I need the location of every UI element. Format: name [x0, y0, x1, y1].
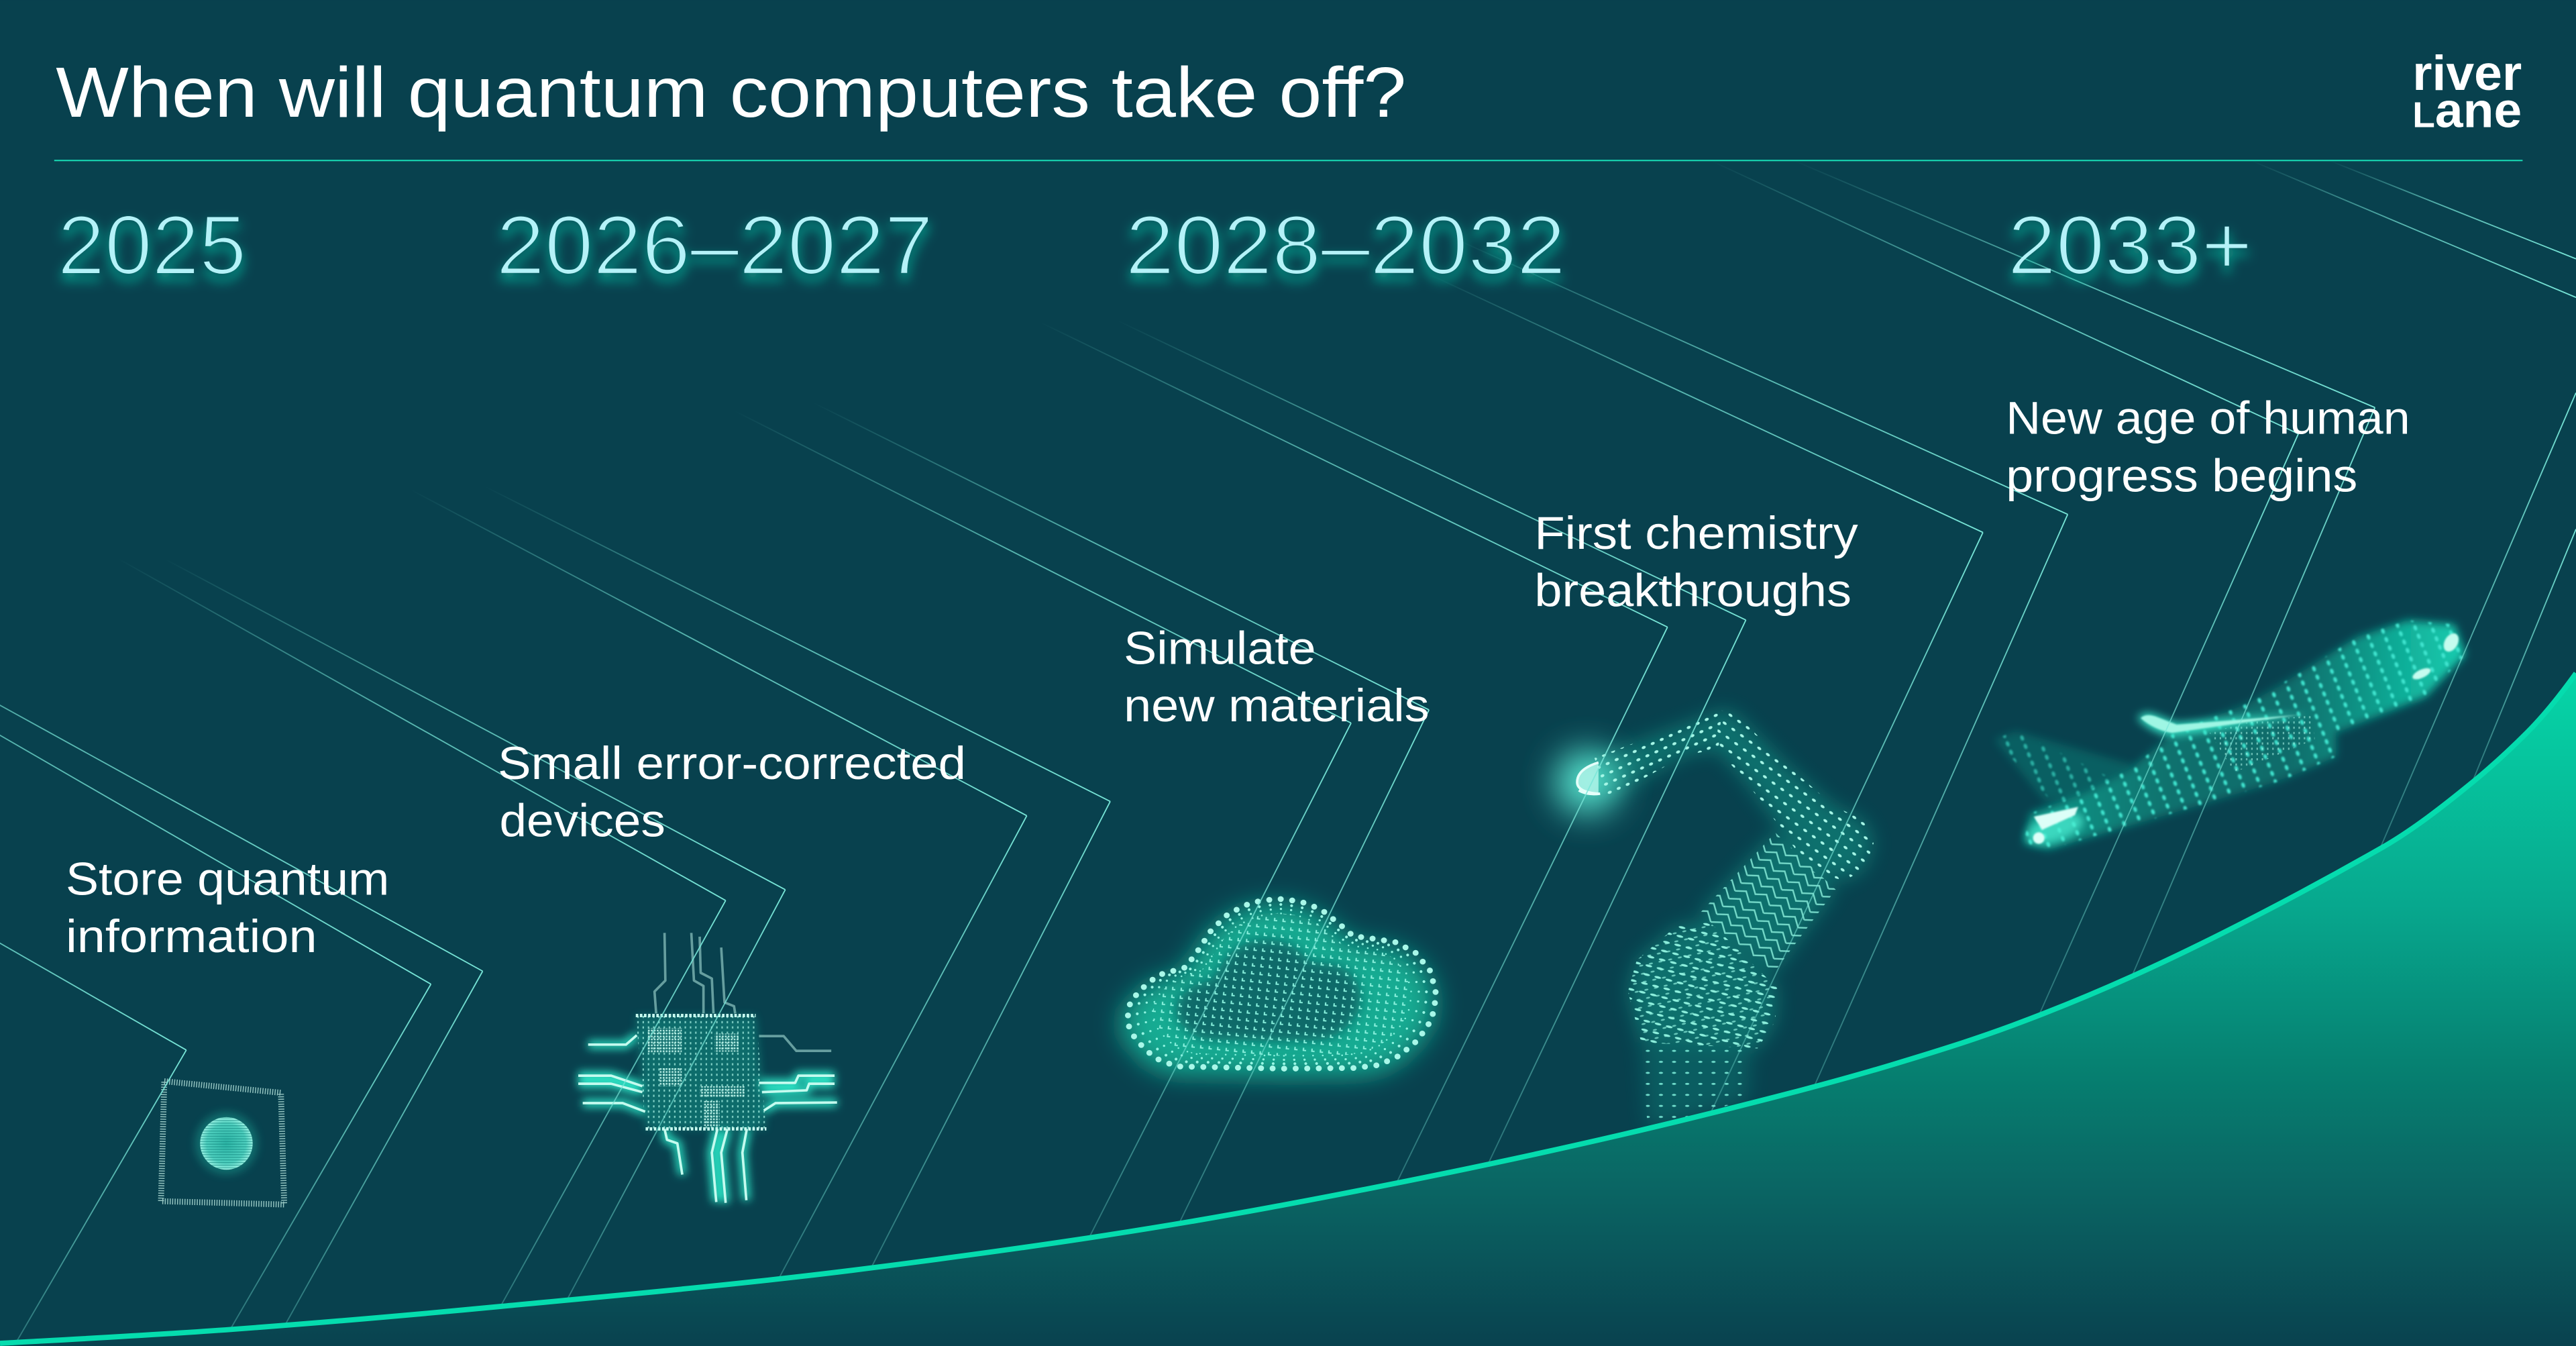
tail fin glow [1994, 731, 2136, 802]
wing highlight glow [2137, 713, 2312, 736]
cloud outer halo [1122, 904, 1436, 1077]
icon: aeroplane [1994, 621, 2465, 850]
year: 2026-2027: 2026–2027 [496, 199, 933, 292]
upper arm [1717, 710, 1874, 881]
label: first chemistry breakthroughs: First chemistry [1534, 507, 1859, 559]
tail highlight [2033, 807, 2078, 844]
icon: dotted cloud [1122, 898, 1436, 1077]
growth curve line [0, 673, 2576, 1343]
tail highlight glow [2023, 807, 2088, 850]
label: small error-corrected devices [498, 737, 966, 847]
wing highlight [2141, 715, 2300, 733]
robot arm glow [1577, 710, 1874, 1129]
year: 2033+: 2033+ [2008, 199, 2253, 292]
label: simulate new materials: Simulate [1124, 622, 1316, 674]
label: new age of human progress begins: progress begins [2006, 450, 2357, 501]
title: When will quantum computers take off? [56, 53, 1406, 132]
tail fin [1994, 731, 2112, 805]
year: 2028-2032: 2028–2032 [1126, 199, 1566, 292]
icon: robot arm [1554, 710, 1874, 1129]
gripper glow [1554, 749, 1620, 815]
label: simulate new materials: new materials [1124, 680, 1430, 731]
cloud interior grid [1152, 913, 1412, 1056]
label: small error-corrected devices: devices [499, 795, 665, 847]
label: store quantum information: Store quantum [66, 853, 389, 904]
label: new age of human progress begins: New age of human [2006, 393, 2410, 444]
logo: riverlane [2412, 45, 2522, 138]
robot base joint [1628, 923, 1778, 1048]
label: small error-corrected devices: Small error-corrected [498, 737, 966, 789]
gripper [1577, 762, 1600, 794]
pedestal [1642, 1045, 1751, 1129]
label: store quantum information: information [66, 911, 317, 962]
plane glow [2023, 621, 2465, 849]
chip bright traces [578, 1035, 837, 1203]
logo: riverlane: Lane [2412, 82, 2522, 138]
year: 2025: 2025 [58, 199, 246, 292]
cloud rim dots [1128, 898, 1436, 1069]
nose highlight [2411, 631, 2462, 682]
logo: riverlane: river [2412, 45, 2522, 101]
label: new age of human progress begins [2006, 393, 2410, 501]
label: simulate new materials [1124, 622, 1430, 731]
label: first chemistry breakthroughs [1534, 507, 1859, 617]
forearm [1595, 710, 1722, 797]
chip body [636, 1015, 766, 1129]
lower arm [1699, 833, 1835, 974]
qubit sphere [195, 1112, 258, 1175]
chip dim traces [655, 933, 831, 1051]
plane body dots [2023, 621, 2465, 849]
label: first chemistry breakthroughs: breakthroughs [1534, 565, 1851, 617]
chip traces glow [578, 1035, 837, 1203]
growth curve area [0, 673, 2576, 1346]
icon: quantum chip [578, 933, 837, 1203]
wing [2210, 715, 2315, 772]
cloud dark interior [1176, 939, 1361, 1041]
icon: qubit in a dotted frame [161, 1081, 284, 1204]
header rule [54, 160, 2522, 161]
label: store quantum information [66, 853, 389, 962]
